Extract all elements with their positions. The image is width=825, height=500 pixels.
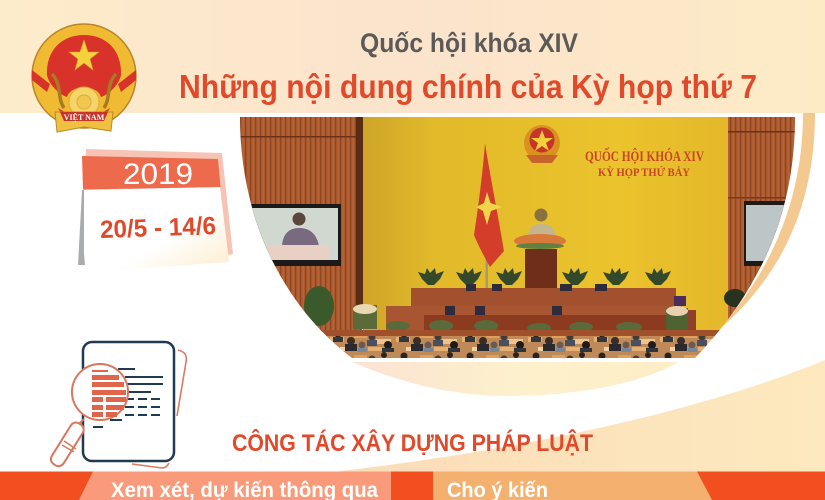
plants xyxy=(418,268,671,285)
date range: 20/5 - 14/6 xyxy=(100,212,216,244)
bottom-right cream sweep xyxy=(340,360,825,472)
right screen xyxy=(744,201,785,266)
year: 2019 xyxy=(123,158,193,191)
subtitle: Quốc hội khóa XIV xyxy=(360,28,578,58)
column tab: right xyxy=(433,472,712,500)
rostrum xyxy=(525,249,557,291)
calendar date card xyxy=(78,149,233,272)
column tab: left xyxy=(79,472,391,500)
national emblem: VIỆT NAM xyxy=(64,113,105,122)
wall lettering xyxy=(585,147,704,179)
bottom bar xyxy=(0,472,825,500)
tan arc around photo xyxy=(715,113,815,333)
flower stands xyxy=(353,304,688,332)
flower arrangements xyxy=(386,320,642,330)
small emblem on wall xyxy=(524,125,560,163)
left wood wall xyxy=(240,117,362,332)
right dark plant xyxy=(724,289,746,307)
delegates seating xyxy=(320,336,740,358)
header band xyxy=(0,0,825,113)
flag xyxy=(474,143,504,290)
yellow wall xyxy=(363,117,728,332)
photo: National Assembly hall xyxy=(240,117,795,358)
bust and flowers xyxy=(514,208,566,249)
left potted plant xyxy=(304,286,334,326)
title: Những nội dung chính của Kỳ họp thứ 7 xyxy=(179,68,757,105)
cream shape under photo xyxy=(352,362,678,396)
people on dais xyxy=(445,284,686,315)
right wood wall xyxy=(728,117,795,332)
left screen xyxy=(249,204,341,266)
dais tiers xyxy=(386,288,696,332)
national emblem xyxy=(32,24,136,132)
icon: document under magnifying glass xyxy=(49,342,186,468)
section heading: CÔNG TÁC XÂY DỰNG PHÁP LUẬT xyxy=(232,429,593,457)
wall lettering: QUỐC HỘI KHÓA XIV xyxy=(585,147,704,165)
wall lettering: KỲ HỌP THỨ BẢY xyxy=(598,165,690,179)
